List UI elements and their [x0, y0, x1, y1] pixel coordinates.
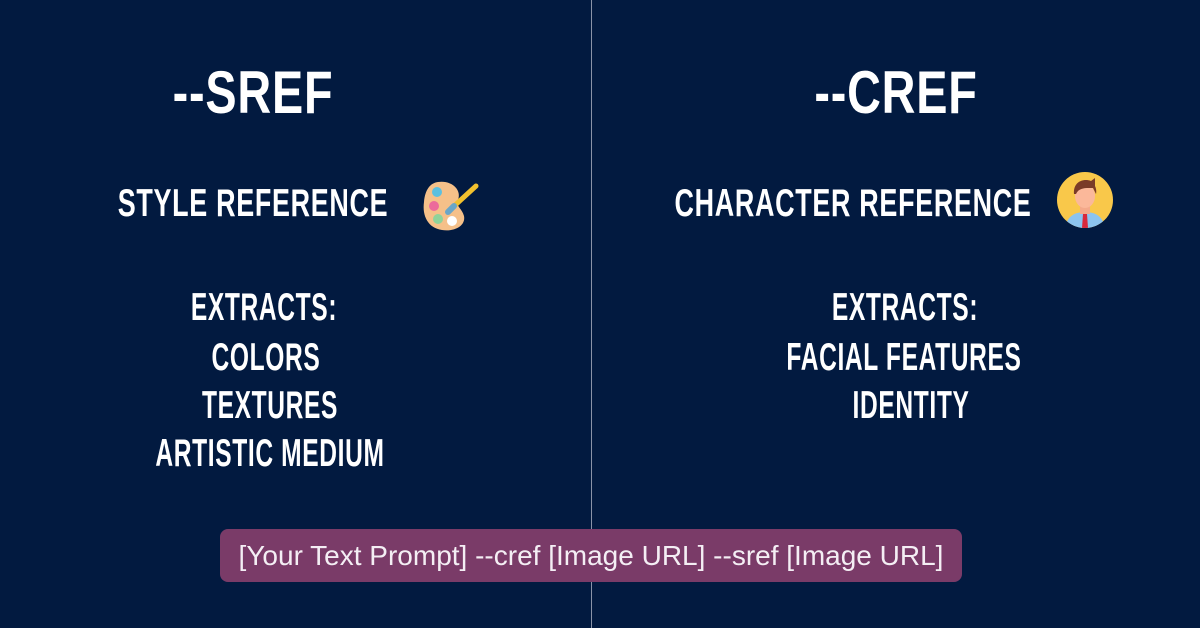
icon: character avatar	[1057, 172, 1113, 228]
text: EXTRACTS:	[191, 286, 337, 329]
prompt box	[220, 529, 962, 582]
text: TEXTURES	[202, 384, 338, 427]
text: ARTISTIC MEDIUM	[155, 432, 385, 475]
subtitle: style reference: STYLE REFERENCE	[118, 182, 388, 225]
divider	[591, 0, 592, 628]
text: COLORS	[212, 336, 320, 379]
text: IDENTITY	[853, 384, 969, 427]
subtitle: character reference: CHARACTER REFERENCE	[675, 182, 1031, 225]
text block: sref extracts	[155, 286, 385, 475]
title: cref: --CREF	[814, 59, 978, 126]
text block: cref extracts	[786, 286, 1022, 427]
title: sref: --SREF	[173, 59, 333, 126]
text: FACIAL FEATURES	[786, 336, 1022, 379]
prompt box: [Your Text Prompt] --cref [Image URL] --sref [Image URL]	[239, 540, 943, 570]
text: EXTRACTS:	[832, 286, 978, 329]
icon: palette	[424, 182, 478, 230]
